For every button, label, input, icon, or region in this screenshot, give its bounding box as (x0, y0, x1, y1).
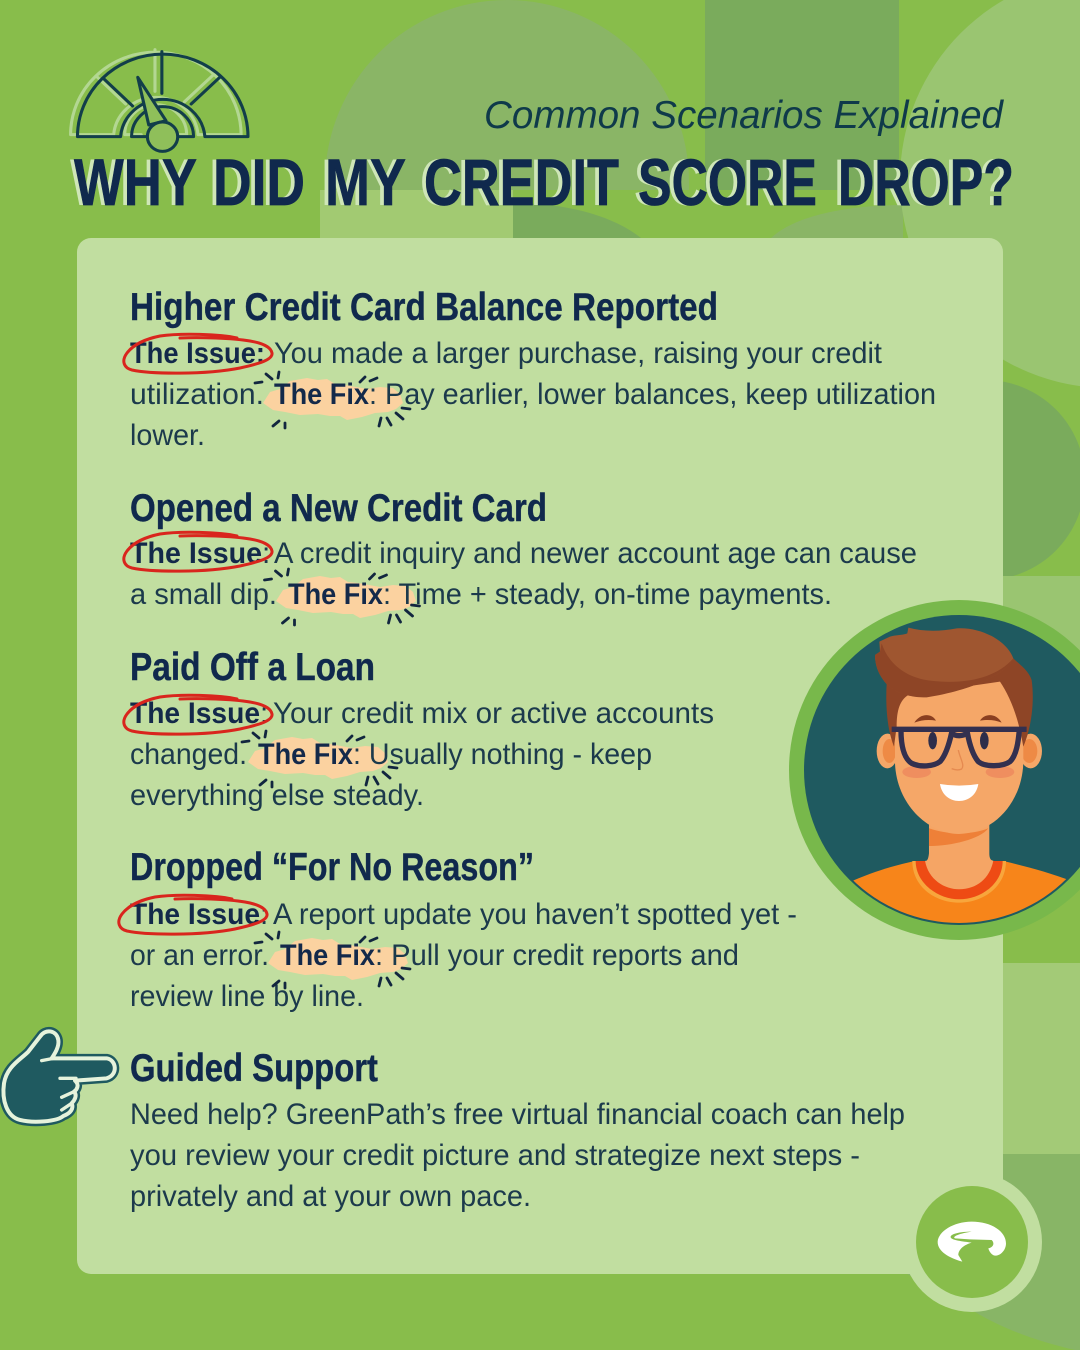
section: paid off a loan (124, 646, 714, 812)
issue and fix text: The Fix (258, 738, 354, 771)
heading: new card: Opened a New Credit Card (130, 487, 547, 530)
issue and fix text: The Issue (130, 898, 260, 931)
red circle on the issue (124, 695, 272, 734)
title: MY (325, 145, 406, 219)
issue and fix text: utilization. (130, 378, 264, 411)
sparks around the fix (255, 372, 410, 428)
issue and fix text: everything else steady. (130, 779, 424, 812)
glasses (892, 729, 1027, 766)
red circle on the issue (119, 895, 267, 934)
section: dropped for no reason (119, 846, 797, 1013)
issue and fix text: lower. (130, 419, 205, 452)
issue and fix text: : Pay earlier, lower balances, keep utilization (369, 378, 936, 411)
title: SCORE (634, 145, 813, 219)
collar (912, 861, 1006, 903)
highlight: the fix (276, 576, 416, 618)
issue and fix text: a small dip. (130, 578, 277, 611)
issue and fix text: The Fix (280, 939, 376, 972)
title: SCORE (638, 145, 817, 219)
issue and fix text: The Issue (130, 537, 262, 570)
support text: you review your credit picture and strategize next steps - (130, 1139, 860, 1172)
sparks around the fix (255, 932, 410, 988)
issue and fix text: : (260, 898, 268, 931)
issue and fix text: : Pull your credit reports and (375, 939, 739, 972)
title: WHY (70, 145, 193, 219)
neck (925, 823, 993, 889)
support text: privately and at your own pace. (130, 1180, 531, 1213)
illustration: smiling man avatar (789, 600, 1080, 940)
title: WHY (74, 145, 197, 219)
issue and fix text (130, 337, 936, 452)
red circle on the issue (124, 532, 272, 571)
support text (130, 1098, 905, 1213)
issue and fix text: : Usually nothing - keep (353, 738, 652, 771)
sparks around the fix (242, 731, 397, 787)
logo swoosh (938, 1222, 1006, 1262)
highlight: the fix (248, 737, 388, 779)
title: DID (213, 145, 305, 219)
heading: guided support: Guided Support (130, 1047, 378, 1090)
heading: balance: Higher Credit Card Balance Reported (130, 286, 718, 329)
subtitle: Common Scenarios Explained (484, 94, 1004, 137)
section: opened a new credit card (124, 487, 917, 625)
issue and fix text: You made a larger purchase, raising your credit (274, 337, 882, 370)
issue and fix text: The Issue (130, 697, 260, 730)
smile (940, 784, 978, 801)
issue and fix text: The Issue: (130, 337, 265, 370)
heading: no reason: Dropped “For No Reason” (130, 846, 534, 889)
issue and fix text: Your credit mix or active accounts (273, 697, 714, 730)
section: guided support (130, 1047, 905, 1213)
shirt (853, 862, 1066, 923)
icon: pointing hand (3, 1031, 115, 1122)
top hair (875, 628, 1013, 697)
issue and fix text: The Fix (274, 378, 370, 411)
issue and fix text: changed. (130, 738, 247, 771)
brows (914, 715, 1002, 723)
highlight: the fix (268, 938, 408, 980)
highlight: the fix (263, 378, 403, 420)
issue and fix text: The Fix (288, 578, 384, 611)
issue and fix text (130, 898, 797, 1013)
issue and fix text: or an error. (130, 939, 269, 972)
title (70, 145, 1014, 219)
issue and fix text (130, 697, 714, 812)
support text: Need help? GreenPath’s free virtual financial coach can help (130, 1098, 905, 1131)
icon: credit score gauge (71, 50, 248, 151)
title: DID (209, 145, 301, 219)
issue and fix text: A credit inquiry and newer account age can cause (274, 537, 917, 570)
nose (952, 750, 963, 770)
title: DROP? (834, 145, 1010, 219)
side hair (886, 658, 1033, 747)
heading: loan: Paid Off a Loan (130, 646, 375, 689)
issue and fix text: A report update you haven’t spotted yet - (273, 898, 797, 931)
section: higher credit card balance (124, 286, 936, 452)
eyes (928, 732, 937, 749)
cheeks (902, 766, 931, 778)
sparks around the fix (264, 569, 420, 625)
issue and fix text (130, 537, 917, 611)
issue and fix text: review line by line. (130, 980, 364, 1013)
panel: main content (77, 238, 1003, 1274)
logo badge (902, 1172, 1042, 1312)
issue and fix text: : Time + steady, on-time payments. (383, 578, 832, 611)
face (895, 670, 1023, 834)
issue and fix text: : (260, 697, 268, 730)
title: CREDIT (424, 145, 619, 219)
ears (876, 734, 895, 768)
red circle on the issue (124, 334, 272, 373)
title: DROP? (838, 145, 1014, 219)
title: CREDIT (420, 145, 615, 219)
issue and fix text: : (262, 537, 270, 570)
title: MY (321, 145, 402, 219)
